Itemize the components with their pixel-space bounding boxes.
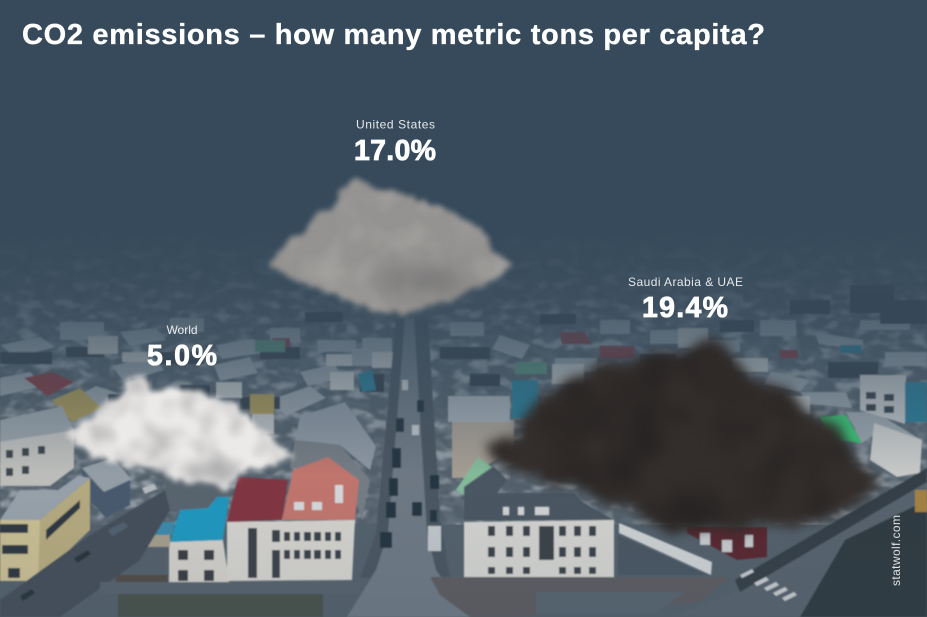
parked cars (380, 400, 439, 548)
label: United States (354, 118, 436, 167)
distant city: dark gap patches (0, 225, 927, 525)
building: tan wall near avenue (452, 420, 514, 478)
central avenue (347, 318, 470, 617)
label: World: 5.0% (147, 340, 217, 372)
distant houses: light roofs (0, 318, 927, 430)
hedges and yard (116, 575, 168, 583)
building: white house with blue roof (169, 540, 229, 582)
building: dark house under the white cloud (165, 472, 225, 512)
label: Saudi Arabia and UAE: Saudi Arabia & UAE (628, 275, 743, 289)
cloud: Saudi Arabia and UAE, black (490, 343, 884, 533)
cloud: United States, grey (267, 178, 511, 313)
distant houses: dark roofs and gaps (0, 285, 927, 409)
title: CO2 emissions – how many metric tons per capita? (22, 19, 765, 51)
building: left corner block (0, 520, 40, 581)
label: World (147, 323, 217, 372)
credit: statwolf.com: statwolf.com (889, 515, 903, 586)
city photograph (0, 285, 927, 617)
crosswalk (740, 569, 797, 601)
building: grey house mid-left (82, 458, 132, 492)
label: World: World (166, 323, 198, 337)
label: United States: 17.0% (354, 135, 436, 167)
building: white block with red and salmon roofs (227, 520, 355, 581)
white diagonal wall and red house (619, 523, 712, 575)
label: United States: United States (356, 118, 435, 132)
trees bottom right (800, 500, 927, 617)
buildings: grey roofs right of the red block (295, 402, 376, 470)
label: Saudi Arabia and UAE (628, 275, 743, 324)
street edges (360, 318, 450, 578)
building: house with white walls at left (0, 406, 74, 442)
coloured roofs (24, 332, 798, 396)
building: white block right edge (846, 412, 922, 443)
distant city: light roof patches (0, 225, 927, 525)
left diagonal street (0, 490, 170, 617)
city base ground (0, 225, 927, 617)
building: big grey-roof white house (464, 520, 614, 577)
label: Saudi Arabia and UAE: 19.4% (642, 292, 728, 324)
pale walls among the houses (0, 328, 906, 482)
cloud: World, white (65, 376, 295, 490)
diagonal road bottom right (670, 482, 927, 617)
sidewalk along the bottom (430, 577, 730, 617)
